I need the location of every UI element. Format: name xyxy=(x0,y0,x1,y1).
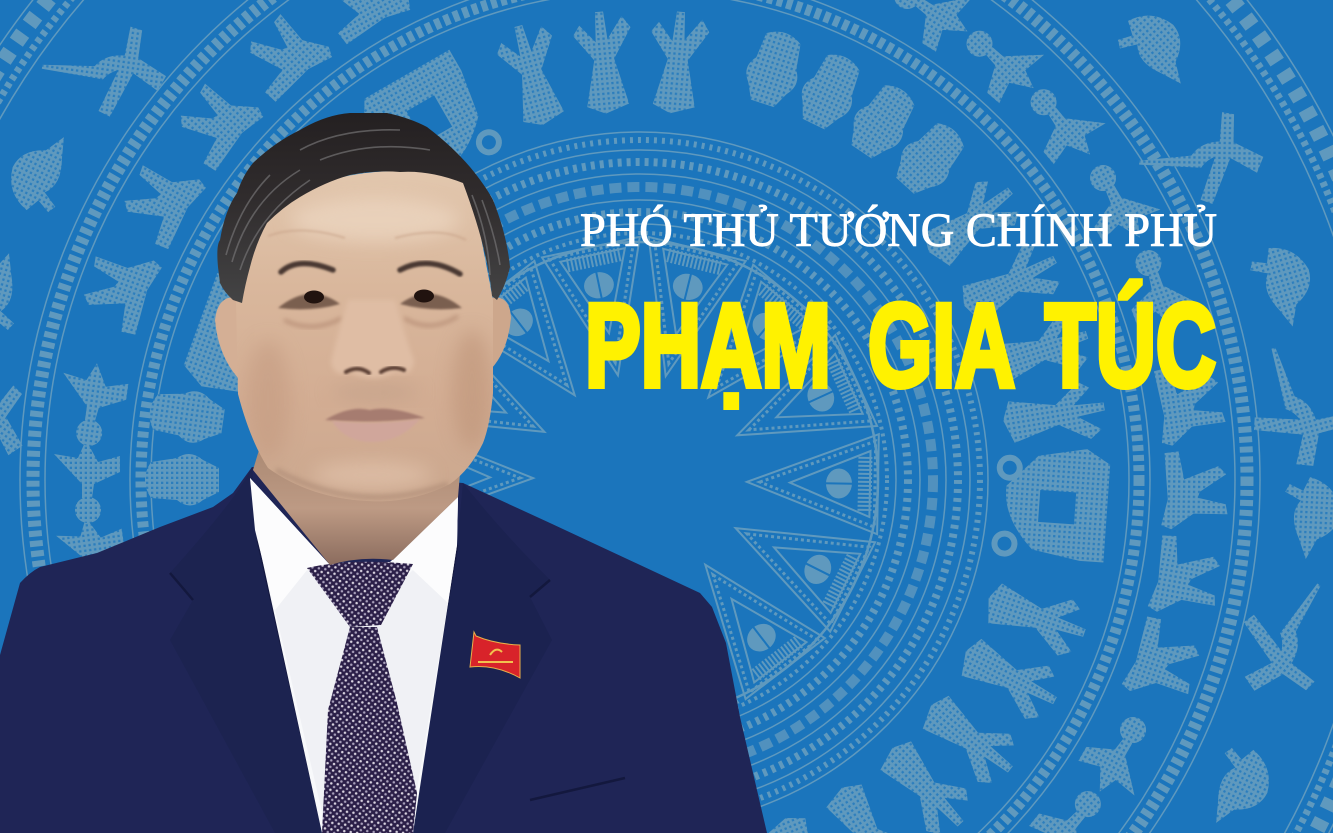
neck xyxy=(253,440,462,565)
portrait of Phạm Gia Túc xyxy=(0,113,767,833)
eyebrows xyxy=(281,263,460,274)
eyes xyxy=(278,290,462,327)
mouth xyxy=(325,409,425,442)
name xyxy=(585,280,1216,412)
party flag pin xyxy=(470,632,520,678)
name: GIA xyxy=(868,280,1015,412)
hair xyxy=(217,113,510,303)
name: TÚC xyxy=(1045,280,1216,412)
subtitle: PHÓ THỦ TƯỚNG CHÍNH PHỦ xyxy=(580,203,1217,257)
ears xyxy=(215,297,511,378)
necktie xyxy=(307,562,417,833)
ring of boats, bird-men and bells xyxy=(145,9,1111,833)
facial shading xyxy=(246,198,492,497)
nose xyxy=(331,300,414,378)
suit jacket xyxy=(0,467,767,833)
white shirt and collar xyxy=(250,478,458,833)
face xyxy=(236,171,493,501)
name: PHẠM xyxy=(585,280,831,412)
star triangles xyxy=(401,237,879,723)
